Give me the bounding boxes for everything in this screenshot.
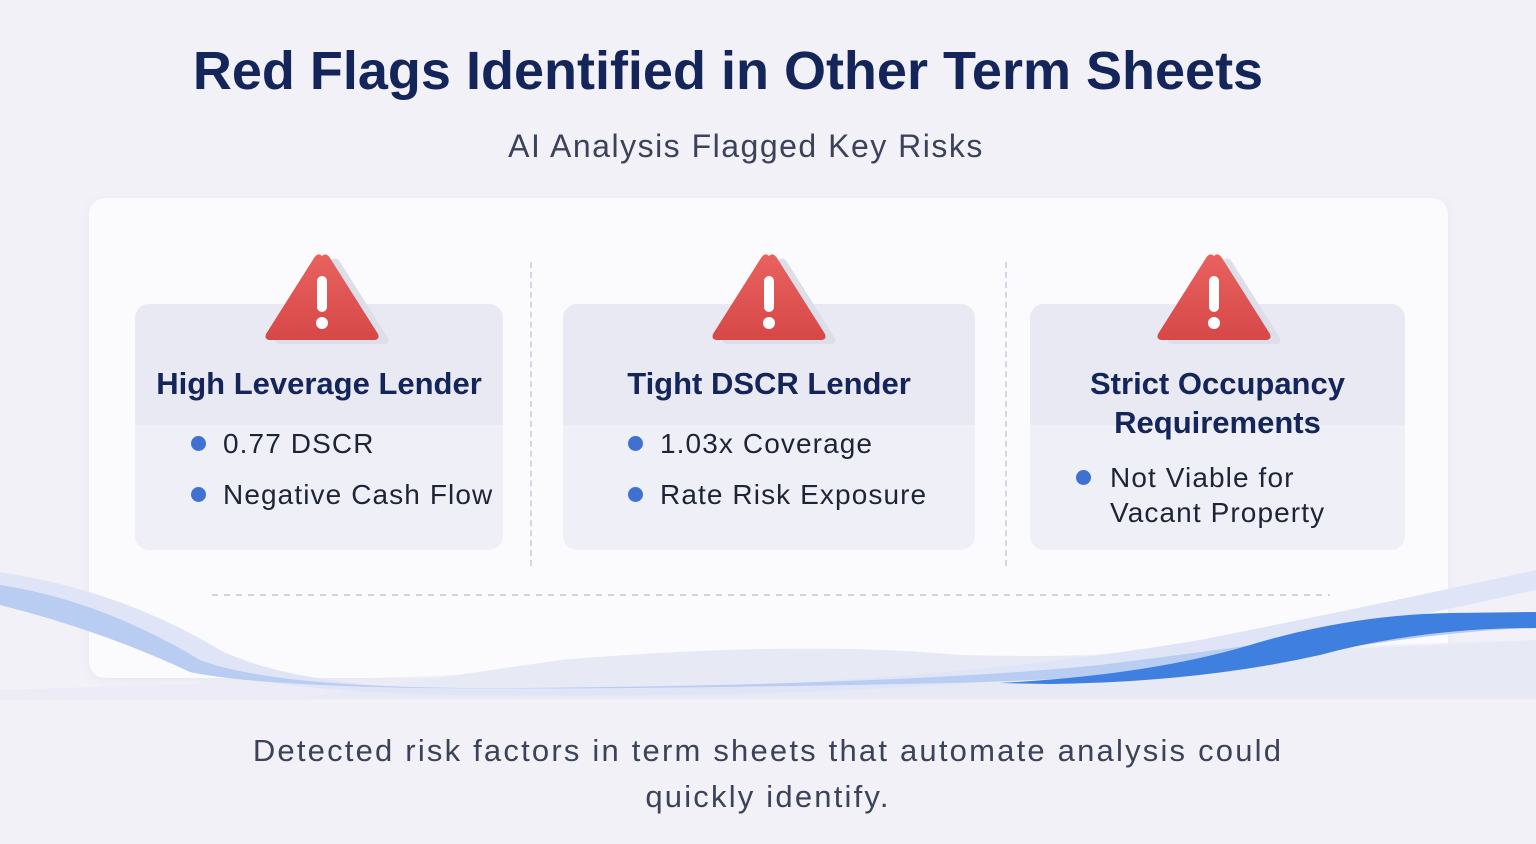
card: tight dscr: Tight DSCR Lender bbox=[627, 366, 911, 401]
card: high leverage: High Leverage Lender bbox=[156, 366, 482, 401]
card: tight dscr: Rate Risk Exposure bbox=[660, 479, 927, 510]
footer text bbox=[253, 733, 1283, 814]
icon: warning 2 bbox=[712, 254, 836, 344]
decorative wave bbox=[0, 570, 1536, 700]
title: Red Flags Identified in Other Term Sheets bbox=[193, 41, 1263, 101]
panel: main bbox=[89, 198, 1448, 678]
card: tight dscr: 1.03x Coverage bbox=[660, 428, 873, 459]
footer text: Detected risk factors in term sheets that automate analysis could bbox=[253, 733, 1283, 768]
icon: warning 3 bbox=[1158, 254, 1280, 344]
card: high leverage bbox=[135, 304, 503, 550]
card: strict occupancy bbox=[1030, 304, 1405, 550]
card: strict occupancy: Strict Occupancy bbox=[1090, 366, 1345, 401]
card: strict occupancy: Not Viable for bbox=[1110, 462, 1295, 493]
card: tight dscr bbox=[563, 304, 975, 550]
card: strict occupancy: Vacant Property bbox=[1110, 497, 1325, 528]
subtitle: AI Analysis Flagged Key Risks bbox=[508, 128, 984, 164]
footer text: quickly identify. bbox=[645, 779, 891, 814]
card: high leverage: 0.77 DSCR bbox=[223, 428, 375, 459]
card: high leverage: Negative Cash Flow bbox=[223, 479, 493, 510]
icon: warning 1 bbox=[266, 254, 388, 344]
card: strict occupancy: Requirements bbox=[1114, 405, 1321, 440]
